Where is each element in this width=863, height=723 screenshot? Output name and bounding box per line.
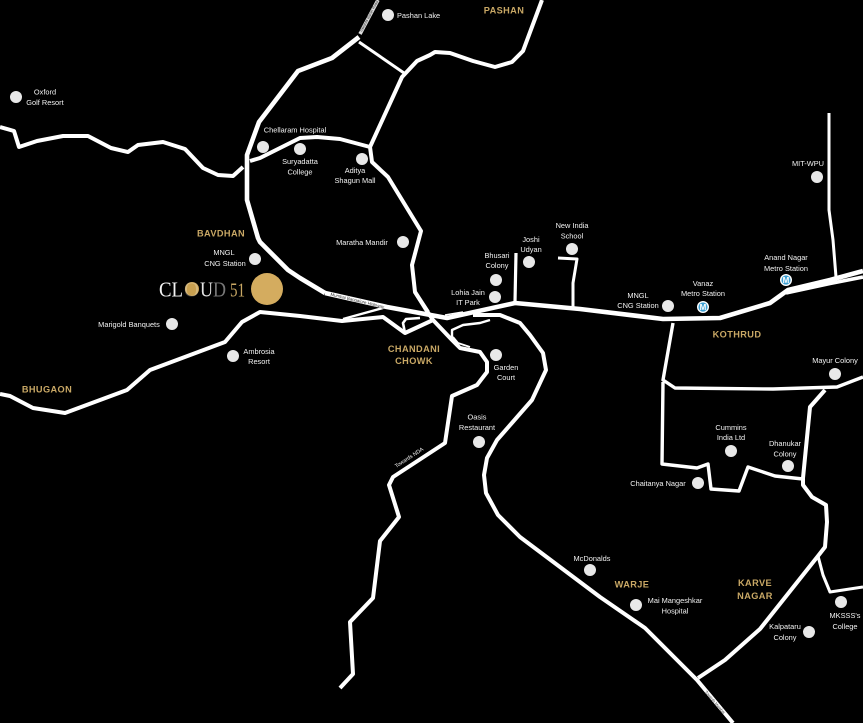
area names: BAVDHAN <box>197 228 245 238</box>
icon: Anand Nagar metro station <box>780 274 792 286</box>
area names: KARVE <box>738 578 772 588</box>
road: western road to Bavdhan <box>0 127 243 176</box>
landmark labels: Golf Resort <box>26 98 64 107</box>
landmark labels: CNG Station <box>204 259 246 268</box>
landmark labels: Colony <box>485 261 509 270</box>
road: Mumbai Bangalore Highway and Kothrud main road <box>325 271 863 319</box>
landmark labels: MKSSS's <box>830 611 861 620</box>
landmark labels: Kalpataru <box>769 622 801 631</box>
landmark labels: Mayur Colony <box>812 356 858 365</box>
landmark labels: Metro Station <box>764 264 808 273</box>
project logo: Cloud 51: D <box>213 278 226 302</box>
area names: CHOWK <box>395 356 433 366</box>
road: interchange inner slip <box>453 337 470 347</box>
landmark labels: MNGL <box>213 248 235 257</box>
road: Pashan road <box>370 0 542 147</box>
area names: CHANDANI <box>388 344 440 354</box>
project logo: Cloud 51: 51 <box>230 280 245 302</box>
landmark labels: Aditya <box>345 166 366 175</box>
landmark labels: Dhanukar <box>769 439 802 448</box>
landmark labels: Pashan Lake <box>397 11 440 20</box>
road: Karve Nagar road <box>698 390 827 678</box>
road: MIT-WPU road <box>829 113 836 277</box>
road: interchange slip road <box>452 320 490 340</box>
landmark labels: Hospital <box>662 606 689 616</box>
project logo: Cloud 51: CL <box>159 278 183 302</box>
road label: top road: Towards Baner Road <box>359 0 379 33</box>
landmark labels: Oxford <box>34 88 56 96</box>
road: highway service lane <box>445 312 463 315</box>
landmark labels: Marigold Banquets <box>98 320 160 329</box>
road name labels <box>330 0 726 715</box>
landmark labels: Colony <box>773 633 797 642</box>
area names: WARJE <box>615 580 649 590</box>
road: northern road through Bavdhan to highway <box>247 37 359 293</box>
area names: PASHAN <box>484 6 524 16</box>
icon: Vanaz metro station: M <box>700 303 707 312</box>
landmark labels: McDonalds <box>574 554 611 563</box>
road label: Towards NDA: Towards NDA <box>394 446 425 470</box>
landmark labels: Ambrosia <box>243 347 275 356</box>
landmark labels: CNG Station <box>617 301 659 310</box>
landmark labels: MIT-WPU <box>792 159 824 168</box>
road: road towards NDA <box>340 292 487 688</box>
landmark labels: College <box>287 168 313 176</box>
road: Kothrud lower loop <box>662 382 803 491</box>
landmark labels: Colony <box>773 450 797 458</box>
landmark labels: IT Park <box>456 298 480 307</box>
landmark labels: Maratha Mandir <box>336 238 388 247</box>
area names: BHUGAON <box>22 384 72 394</box>
road: Chandani Chowk interchange branch <box>343 308 383 319</box>
area names: KOTHRUD <box>713 330 761 340</box>
road: Pashan connector <box>359 42 404 73</box>
road: Pashan Lake road <box>360 0 378 34</box>
landmark labels: Cummins <box>715 423 747 432</box>
landmark labels: Chaitanya Nagar <box>630 479 686 488</box>
landmark labels: Joshi <box>522 235 540 244</box>
road: Bhugaon road <box>0 312 433 413</box>
landmark labels: Oasis <box>468 412 487 422</box>
landmark labels: Resort <box>248 357 270 366</box>
icon: Vanaz metro station <box>697 301 709 313</box>
area names: NAGAR <box>737 591 773 601</box>
landmark labels: Bhusari <box>484 251 510 260</box>
landmark labels: Metro Station <box>681 289 725 298</box>
project logo: Cloud 51: O <box>184 278 199 302</box>
landmark labels: Lohia Jain <box>451 288 485 297</box>
road label: Towards Mumbai: Towards Mumbai <box>704 690 726 715</box>
road: Kothrud link road <box>663 323 863 389</box>
landmark labels: Anand Nagar <box>764 253 808 262</box>
landmark labels: Garden <box>494 363 518 372</box>
road: road to Warje <box>473 315 733 723</box>
landmark labels: Court <box>497 373 515 382</box>
landmark labels: India Ltd <box>717 433 745 442</box>
landmark labels: MNGL <box>627 291 649 300</box>
area names <box>22 6 773 601</box>
project location marker <box>251 273 283 305</box>
landmark labels: Vanaz <box>693 279 714 288</box>
icon: Anand Nagar metro station: M <box>783 276 790 285</box>
project logo: Cloud 51: U <box>200 278 213 302</box>
landmark labels: Suryadatta <box>282 157 319 166</box>
road: parallel service lane <box>786 277 863 293</box>
landmark labels: New India <box>556 221 589 230</box>
landmark labels: School <box>561 232 584 240</box>
project logo: Cloud 51 <box>159 278 245 302</box>
road: Joshi Udyan lane <box>515 253 516 302</box>
landmark labels: Shagun Mall <box>334 176 376 185</box>
road: MKSSS College branch <box>818 556 863 592</box>
landmark labels: Restaurant <box>459 423 495 432</box>
road: Bavdhan cross road <box>250 137 428 312</box>
landmark labels: College <box>832 622 858 631</box>
landmark labels: Udyan <box>520 245 542 254</box>
landmark labels: Mai Mangeshkar <box>648 596 703 605</box>
landmark labels: Chellaram Hospital <box>264 126 327 134</box>
road label: Mumbai Bangalore Highway: Mumbai Bangalore Highway <box>330 292 385 310</box>
road: Chandani Chowk small loop <box>403 318 420 333</box>
road: New India School lane <box>558 258 577 308</box>
